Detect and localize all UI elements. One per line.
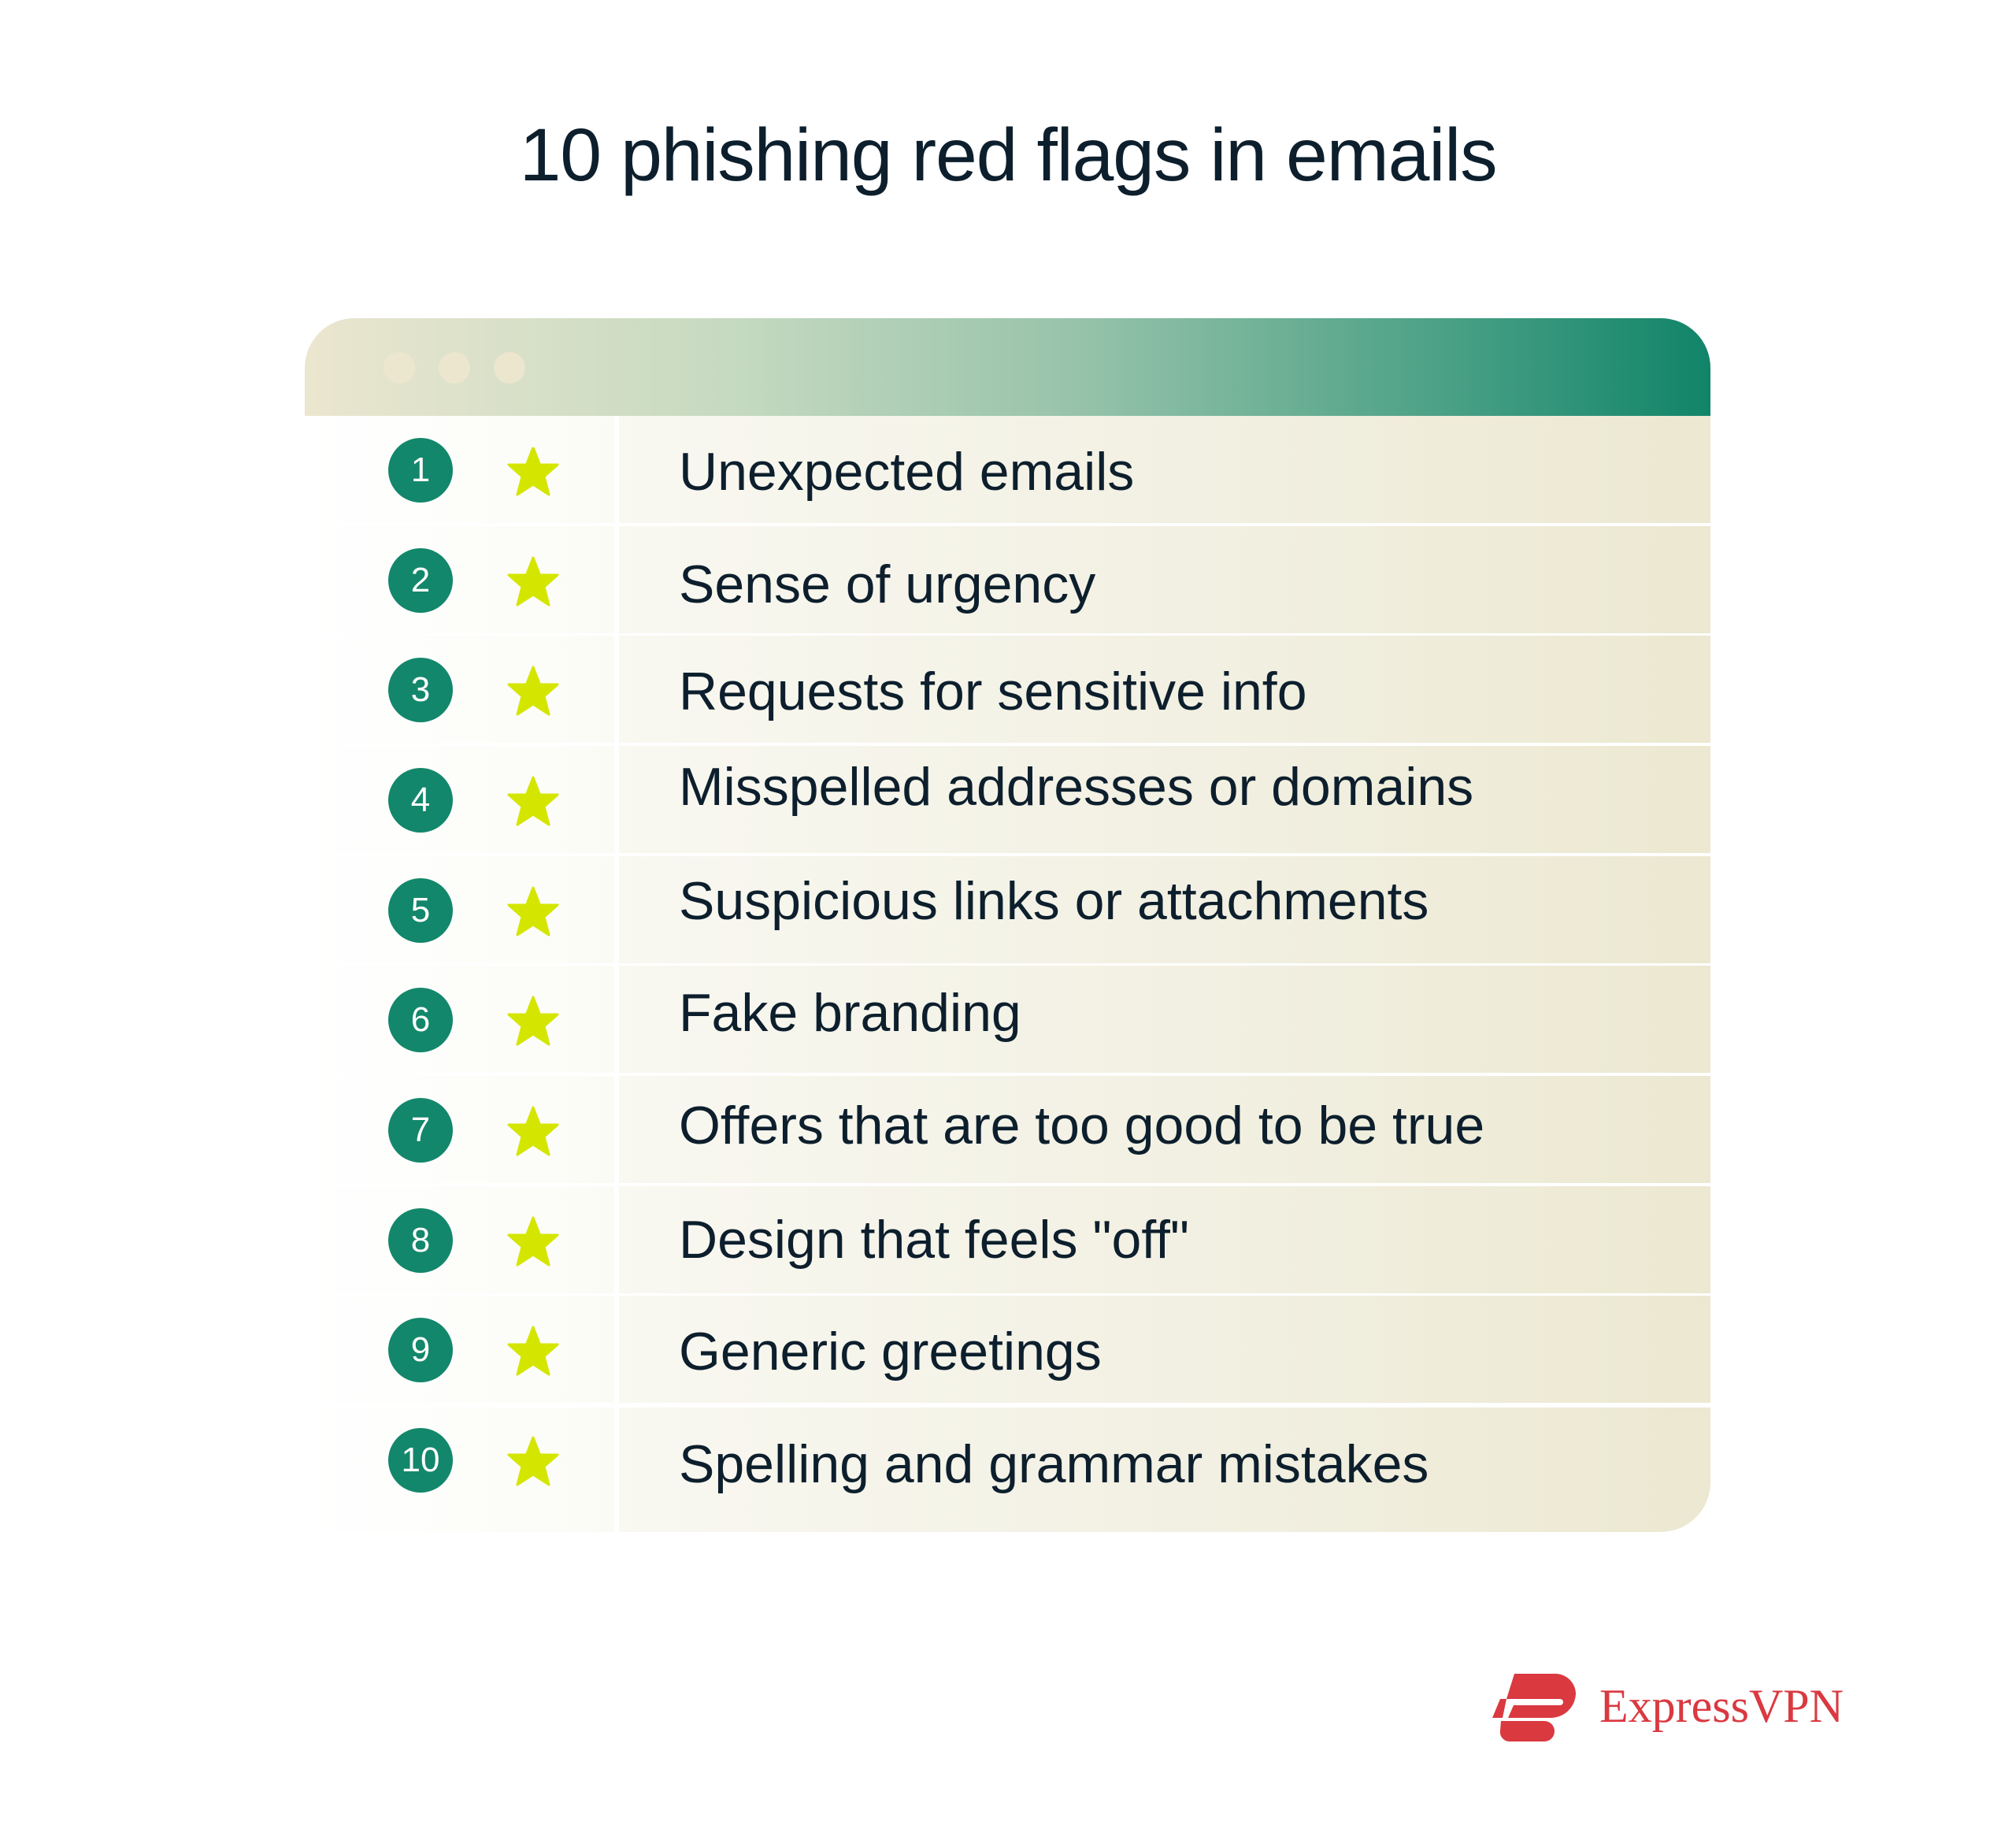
row 10 [582, 1408, 1710, 1532]
row 8 [582, 1186, 1710, 1293]
number badges: 6 [411, 1000, 430, 1039]
star icons [507, 447, 559, 1486]
number badges: 1 [411, 451, 430, 489]
logo: ExpressVPN [1492, 1674, 1844, 1741]
number badges: 5 [411, 891, 430, 929]
number badges: 9 [411, 1330, 430, 1369]
number badges [388, 438, 453, 1493]
number badges: 8 [411, 1221, 430, 1259]
row 9 [582, 1296, 1710, 1403]
number badges: 3 [411, 670, 430, 709]
row 7 [582, 1076, 1710, 1183]
panel: email window [305, 318, 1710, 416]
item texts: Spelling and grammar mistakes [679, 1434, 1429, 1494]
logo icon [1492, 1674, 1576, 1741]
number badges: 10 [402, 1441, 439, 1479]
number badges: 4 [411, 781, 430, 819]
item texts: Generic greetings [679, 1322, 1102, 1382]
item texts: Design that feels "off" [679, 1210, 1189, 1270]
row 2 [582, 526, 1710, 633]
item texts: Offers that are too good to be true [679, 1096, 1484, 1155]
row 5 [582, 856, 1710, 963]
row 1 [582, 416, 1710, 523]
item texts: Unexpected emails [679, 442, 1134, 502]
number badges: 7 [411, 1111, 430, 1149]
row 3 [582, 636, 1710, 743]
item texts: Misspelled addresses or domains [679, 757, 1473, 817]
window header bar [305, 318, 1710, 416]
logo wordmark: ExpressVPN [1599, 1680, 1844, 1732]
title: 10 phishing red flags in emails [520, 113, 1496, 197]
item texts: Requests for sensitive info [679, 662, 1307, 721]
item texts: Fake branding [679, 983, 1021, 1043]
row 6 [582, 966, 1710, 1073]
window dots [385, 352, 525, 384]
row 4 [582, 746, 1710, 853]
number badges: 2 [411, 561, 430, 599]
item texts: Suspicious links or attachments [679, 871, 1429, 931]
item texts: Sense of urgency [679, 555, 1095, 614]
